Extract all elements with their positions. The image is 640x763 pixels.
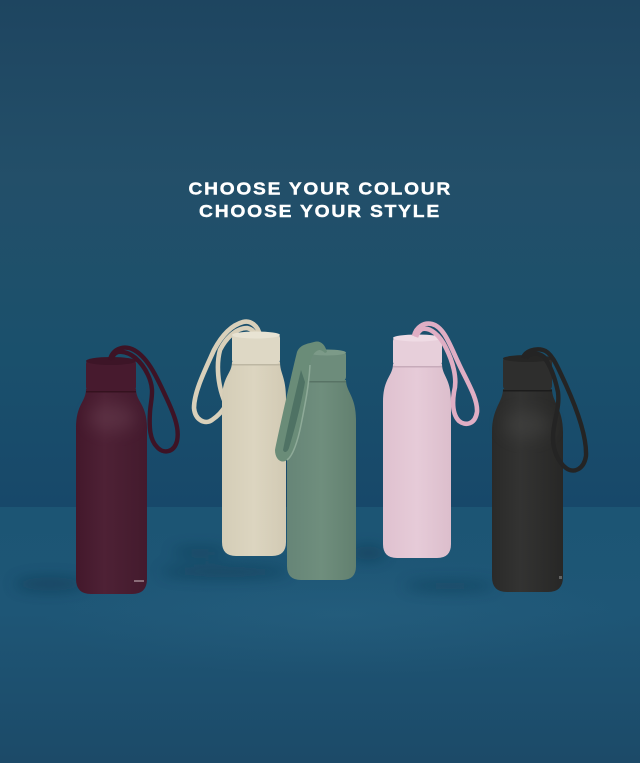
bottle: cream <box>194 322 286 556</box>
floor light <box>40 555 640 675</box>
bottle: burgundy <box>76 348 178 594</box>
floor <box>0 507 640 763</box>
heading <box>188 178 452 221</box>
bottle shadows <box>14 546 496 591</box>
bottle: green <box>275 341 356 580</box>
heading: CHOOSE YOUR COLOUR <box>188 178 452 198</box>
heading: CHOOSE YOUR STYLE <box>199 201 441 221</box>
bottle: pink <box>383 324 477 558</box>
bottle: black <box>492 349 586 592</box>
background wall <box>0 0 640 508</box>
